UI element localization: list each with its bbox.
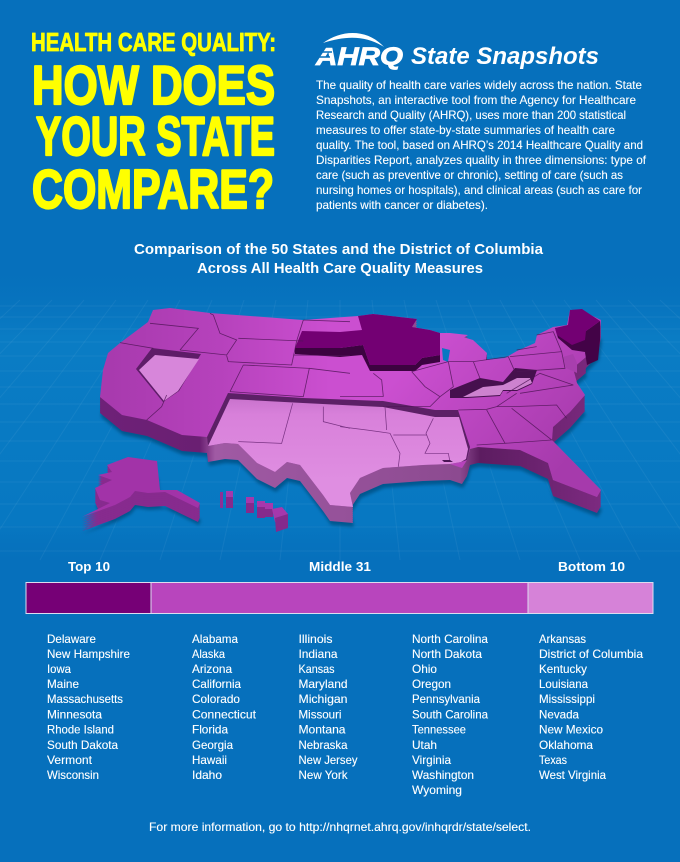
- gulf lake detail: [442, 460, 453, 462]
- list: top 10 states: South Dakota: [47, 738, 118, 752]
- chart heading: Comparison of the 50 States and the District of Columbia: [134, 241, 544, 258]
- legend headings: Middle 31: [309, 559, 371, 574]
- list: middle 31 states, column 3: North Dakota: [412, 647, 482, 661]
- list: top 10 states: Minnesota: [47, 708, 102, 722]
- list: bottom 10 states: Oklahoma: [539, 738, 593, 752]
- list: middle 31 states, column 1: Alabama: [192, 632, 238, 646]
- south central states, bottom group, sunken: [207, 393, 470, 507]
- Connecticut and coast detail: [563, 354, 577, 373]
- list: middle 31 states, column 2: Michigan: [298, 692, 348, 706]
- list: middle 31 states, column 2: New York: [298, 768, 348, 782]
- list: middle 31 states, column 1: Arizona: [192, 662, 232, 676]
- list: top 10 states: Wisconsin: [47, 768, 99, 782]
- legend headings: Bottom 10: [558, 559, 625, 574]
- list: middle 31 states, column 1: California: [192, 677, 241, 691]
- map side walls: [100, 310, 601, 523]
- southeast shading: [100, 308, 601, 507]
- list: bottom 10 states: Arkansas: [539, 632, 586, 646]
- list: middle 31 states, column 2: Kansas: [298, 662, 334, 676]
- list: middle 31 states, column 1: Alaska: [192, 647, 225, 661]
- list: top 10 states: Maine: [47, 677, 79, 691]
- Alaska: [82, 457, 201, 534]
- list: bottom 10 states: Kentucky: [539, 662, 587, 676]
- legend bar: [26, 582, 653, 614]
- list: middle 31 states, column 2: Illinois: [298, 632, 332, 646]
- lake michigan: [442, 348, 450, 362]
- list: middle 31 states, column 3: Washington: [412, 768, 474, 782]
- list: middle 31 states, column 1: Florida: [192, 722, 228, 736]
- list: middle 31 states, column 3: Pennsylvania: [412, 692, 480, 706]
- logo arc: [323, 33, 384, 47]
- list: middle 31 states, column 3: North Carolina: [412, 632, 488, 646]
- Kentucky and West Virginia, bottom group, sunken: [450, 368, 537, 398]
- list: middle 31 states, column 3: Virginia: [412, 753, 451, 767]
- logo stripes: [316, 47, 334, 57]
- list: middle 31 states, column 3: [412, 632, 488, 797]
- list: middle 31 states, column 2: Maryland: [298, 677, 348, 691]
- intro paragraph: quality. The tool, based on AHRQ’s 2014 Healthcare Quality and: [316, 138, 643, 152]
- list: middle 31 states, column 1: [192, 632, 257, 782]
- title: [31, 27, 276, 220]
- intro paragraph: Snapshots, an interactive tool from the Agency for Healthcare: [316, 93, 636, 107]
- title line 1: HOW DOES: [32, 54, 275, 116]
- state borders: [120, 313, 350, 420]
- Upper Midwest, top group, raised: [295, 314, 440, 371]
- list: top 10 states: Massachusetts: [47, 692, 123, 706]
- title line 2: YOUR STATE: [36, 105, 275, 167]
- list: top 10 states: Iowa: [47, 662, 71, 676]
- logo State Snapshots: State Snapshots: [411, 43, 599, 70]
- list: middle 31 states, column 2: Indiana: [298, 647, 338, 661]
- list: top 10 states: Vermont: [47, 753, 93, 767]
- legend headings: [68, 559, 625, 574]
- intro paragraph: Disparities Report, analyzes quality in three dimensions: type of: [316, 153, 647, 167]
- Hawaii: [220, 491, 288, 532]
- list: middle 31 states, column 3: South Carolina: [412, 708, 488, 722]
- intro paragraph: patients with cancer or diabetes).: [316, 198, 488, 212]
- list: middle 31 states, column 2: New Jersey: [298, 753, 358, 767]
- list: middle 31 states, column 3: Ohio: [412, 662, 437, 676]
- footer source note: For more information, go to http://nhqrnet.ahrq.gov/inhqrdr/state/select.: [149, 820, 531, 834]
- Nevada, bottom group, sunken: [136, 348, 201, 402]
- list: middle 31 states, column 1: Georgia: [192, 738, 233, 752]
- list: middle 31 states, column 2: Missouri: [298, 708, 342, 722]
- map shadow: [101, 328, 602, 527]
- AHRQ State Snapshots logo: [315, 33, 599, 71]
- logo AHRQ wordmark: AHRQ: [315, 43, 404, 71]
- list: bottom 10 states: Texas: [539, 753, 567, 767]
- chart heading: [134, 241, 544, 277]
- legend headings: Top 10: [68, 559, 110, 574]
- intro paragraph: nursing homes or hospitals), and clinical areas (such as care for: [316, 183, 642, 197]
- list: middle 31 states, column 1: Idaho: [192, 768, 222, 782]
- list: middle 31 states, column 1: Hawaii: [192, 753, 227, 767]
- list: middle 31 states, column 3: Wyoming: [412, 783, 462, 797]
- list: bottom 10 states: New Mexico: [539, 722, 603, 736]
- list: bottom 10 states: Nevada: [539, 708, 579, 722]
- list: bottom 10 states: Louisiana: [539, 677, 588, 691]
- list: middle 31 states, column 2: Montana: [298, 722, 346, 736]
- intro paragraph: [316, 78, 647, 212]
- list: top 10 states: [47, 632, 130, 782]
- intro paragraph: Research and Quality (AHRQ), uses more than 200 statistical: [316, 108, 626, 122]
- New England, top group, raised: [555, 309, 600, 365]
- list: top 10 states: Rhode Island: [47, 722, 114, 736]
- title line 3: COMPARE?: [32, 158, 274, 220]
- chart heading: Across All Health Care Quality Measures: [197, 260, 483, 277]
- list: bottom 10 states: District of Columbia: [539, 647, 643, 661]
- list: middle 31 states, column 1: Colorado: [192, 692, 240, 706]
- list: middle 31 states, column 3: Oregon: [412, 677, 451, 691]
- title kicker: HEALTH CARE QUALITY:: [31, 27, 276, 57]
- list: bottom 10 states: West Virginia: [539, 768, 606, 782]
- intro paragraph: care (such as preventive or chronic), setting of care (such as: [316, 168, 623, 182]
- list: bottom 10 states: Mississippi: [539, 692, 595, 706]
- 3D map of the United States: [82, 308, 602, 534]
- list: top 10 states: New Hampshire: [47, 647, 130, 661]
- list: bottom 10 states: [539, 632, 643, 782]
- list: middle 31 states, column 1: Connecticut: [192, 708, 257, 722]
- list: middle 31 states, column 3: Tennessee: [412, 722, 466, 736]
- intro paragraph: The quality of health care varies widely across the nation. State: [316, 78, 642, 92]
- list: middle 31 states, column 2: [298, 632, 358, 782]
- contiguous states, middle group: [100, 308, 601, 507]
- list: middle 31 states, column 2: Nebraska: [298, 738, 348, 752]
- perspective grid: [0, 300, 680, 560]
- intro paragraph: measures to offer state-by-state summaries of health care: [316, 123, 615, 137]
- list: top 10 states: Delaware: [47, 632, 96, 646]
- list: middle 31 states, column 3: Utah: [412, 738, 437, 752]
